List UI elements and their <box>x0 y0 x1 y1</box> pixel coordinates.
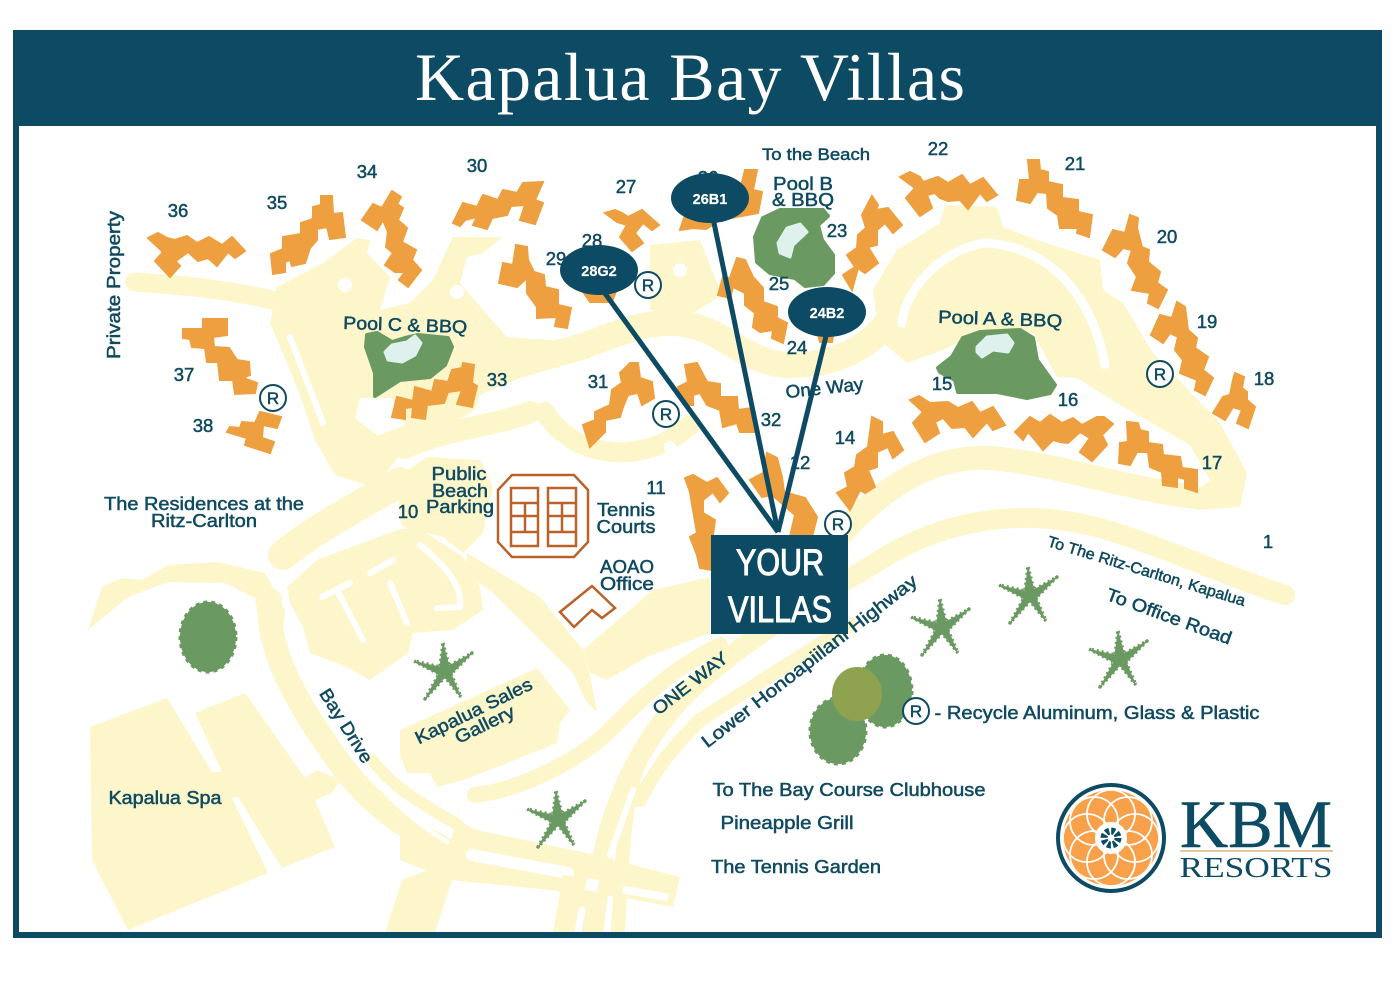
oval 26b1: 26B1 <box>693 192 727 208</box>
r marker: R <box>910 702 922 721</box>
building 22 <box>900 172 997 216</box>
building 37 <box>183 319 257 394</box>
building 34 <box>362 191 421 287</box>
building 24 <box>815 325 835 342</box>
29: 29 <box>546 248 566 269</box>
pool a <box>938 330 1055 398</box>
35: 35 <box>267 192 287 213</box>
r marker: R <box>642 276 654 295</box>
12: 12 <box>790 452 810 473</box>
building 32 <box>678 363 755 432</box>
title banner <box>13 30 1382 126</box>
oval 28g2: 28G2 <box>581 264 617 280</box>
bay drive: Bay Drive <box>315 685 377 767</box>
25: 25 <box>769 273 789 294</box>
oval 26b1 <box>671 173 749 223</box>
22: 22 <box>928 138 948 159</box>
villa buildings <box>148 160 1255 570</box>
building 12 <box>750 453 817 537</box>
oval 24b2: 24B2 <box>810 306 844 322</box>
ritz road: To The Ritz-Carlton, Kapalua <box>1045 533 1248 610</box>
1: 1 <box>1263 531 1273 552</box>
38: 38 <box>193 415 213 436</box>
building 31 <box>583 363 654 447</box>
to the beach: To the Beach <box>762 145 870 164</box>
sales gallery ground <box>400 668 570 787</box>
pool b label: Pool B <box>773 174 833 194</box>
r marker: R <box>1154 365 1166 384</box>
10: 10 <box>398 501 418 522</box>
west loop road <box>88 562 285 630</box>
building 36 <box>148 233 245 277</box>
tennis courts label <box>596 500 656 537</box>
pool b bbq: & BBQ <box>772 190 834 210</box>
r marker <box>1147 361 1173 387</box>
pool a grounds <box>873 205 1247 510</box>
building 14 <box>837 417 903 510</box>
14: 14 <box>835 427 855 448</box>
title: Kapalua Bay Villas <box>415 39 965 115</box>
17: 17 <box>1202 452 1222 473</box>
building 38 <box>227 412 281 453</box>
building 20 <box>1103 215 1167 308</box>
32: 32 <box>761 409 781 430</box>
your villas box: YOUR <box>736 542 824 583</box>
pool a label: Pool A & BBQ <box>938 307 1063 331</box>
unit number labels <box>168 138 1274 552</box>
pineapple: Pineapple Grill <box>720 813 854 833</box>
highway <box>592 508 1295 860</box>
band to aoao <box>465 553 597 712</box>
r marker <box>653 401 679 427</box>
roads and grounds <box>88 205 1285 933</box>
building 11 <box>685 475 728 570</box>
aoao office label: Office <box>600 574 654 594</box>
tennis courts label: Tennis <box>597 500 655 520</box>
building 21 <box>1017 160 1092 237</box>
recycle markers <box>260 272 1173 724</box>
building 33 <box>392 363 477 419</box>
your villas box: VILLAS <box>728 589 832 630</box>
34: 34 <box>357 161 377 182</box>
31: 31 <box>588 371 608 392</box>
oval 24b2 <box>788 287 866 337</box>
11: 11 <box>646 477 666 498</box>
building 15 <box>910 396 1005 442</box>
r marker <box>903 698 929 724</box>
pool c <box>366 333 452 396</box>
23: 23 <box>827 220 847 241</box>
icon: palm 3 <box>911 599 969 655</box>
one way top: One Way <box>785 374 864 402</box>
building 27 <box>605 210 659 251</box>
36: 36 <box>168 200 188 221</box>
building 16 <box>1015 415 1113 461</box>
bay course: To The Bay Course Clubhouse <box>712 780 986 800</box>
r marker <box>635 272 661 298</box>
19: 19 <box>1197 311 1217 332</box>
one way lower: ONE WAY <box>649 648 732 719</box>
residences: The Residences at the <box>104 494 304 514</box>
r marker: R <box>660 405 672 424</box>
16: 16 <box>1058 389 1078 410</box>
building 35 <box>271 196 345 274</box>
building 26 <box>680 170 762 230</box>
sales gallery: Gallery <box>452 702 518 748</box>
30: 30 <box>467 155 487 176</box>
15: 15 <box>932 373 952 394</box>
logo emblem <box>1058 785 1164 891</box>
sales gallery: Kapalua Sales <box>412 674 536 748</box>
public beach parking: Public <box>432 464 486 484</box>
pool b <box>755 210 833 286</box>
unit ovals <box>560 173 866 337</box>
spa block <box>90 693 340 930</box>
south roads <box>400 793 680 907</box>
kbm resorts logo <box>1058 785 1333 891</box>
icon: tennis courts <box>498 475 588 557</box>
tennis courts label: Courts <box>596 517 656 537</box>
icon: tree left <box>180 602 236 672</box>
building 30 <box>453 182 543 229</box>
residences <box>104 494 304 531</box>
sales gallery <box>412 674 543 763</box>
logo wordmark: KBM <box>1180 786 1332 862</box>
building 23 <box>843 196 902 290</box>
building 19 <box>1151 302 1213 395</box>
21: 21 <box>1065 153 1085 174</box>
tennis garden: The Tennis Garden <box>711 857 881 877</box>
kbm resorts logo: RESORTS <box>1180 852 1332 884</box>
icon: tree cluster <box>810 655 912 764</box>
r marker <box>825 511 851 537</box>
pool c label: Pool C & BBQ <box>343 313 468 337</box>
r marker: R <box>832 515 844 534</box>
recycle legend: - Recycle Aluminum, Glass & Plastic <box>934 703 1260 723</box>
building 18 <box>1213 373 1255 428</box>
aoao office label: AOAO <box>600 557 654 577</box>
icon: aoao office outline <box>560 586 615 627</box>
24: 24 <box>787 337 807 358</box>
public beach parking <box>426 464 494 517</box>
building 28 <box>575 280 620 302</box>
oval 28g2 <box>560 245 638 295</box>
r marker: R <box>267 389 279 408</box>
icon: palm 1 <box>414 643 472 699</box>
place labels <box>104 145 1260 877</box>
building 29 <box>499 245 571 328</box>
connector lines <box>604 218 827 532</box>
private property: Private Property <box>104 211 124 359</box>
28: 28 <box>582 230 602 251</box>
37: 37 <box>174 364 194 385</box>
icon: palm 2 <box>527 791 585 847</box>
building 25 <box>718 258 787 343</box>
office road: To Office Road <box>1104 584 1234 648</box>
spa: Kapalua Spa <box>108 788 223 808</box>
33: 33 <box>487 369 507 390</box>
your villas box <box>711 535 848 634</box>
public beach parking: Parking <box>426 497 494 517</box>
icon: palm 5 <box>1089 631 1147 687</box>
20: 20 <box>1157 226 1177 247</box>
public beach parking: Beach <box>432 481 488 501</box>
residences: Ritz-Carlton <box>151 511 257 531</box>
icon: palm 4 <box>999 567 1057 623</box>
27: 27 <box>616 176 636 197</box>
aoao office label <box>600 557 654 594</box>
centre lobe <box>287 527 483 680</box>
26: 26 <box>698 167 718 188</box>
building 17 <box>1119 422 1197 492</box>
highway: Lower Honoapiilani Highway <box>698 571 921 752</box>
r marker <box>260 385 286 411</box>
18: 18 <box>1254 368 1274 389</box>
